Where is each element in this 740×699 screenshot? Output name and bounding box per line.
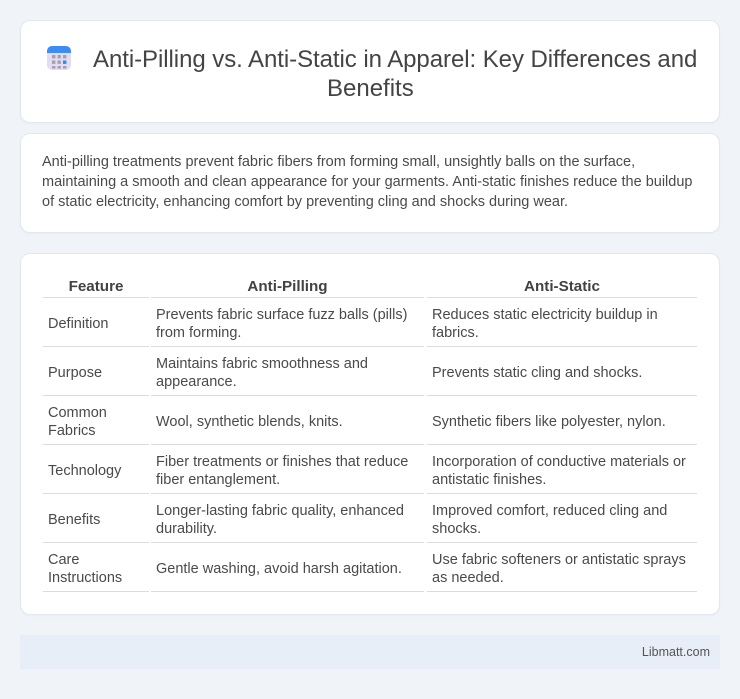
icon: calendar bbox=[47, 46, 71, 70]
row: benefits bbox=[48, 503, 667, 537]
intro text: Anti-pilling treatments prevent fabric fibers from forming small, unsightly balls on the surface, bbox=[42, 154, 635, 170]
row: technology: fiber entanglement. bbox=[156, 472, 280, 488]
row: purpose: Purpose bbox=[48, 365, 102, 381]
row: definition: fabrics. bbox=[432, 325, 479, 341]
row: benefits: Improved comfort, reduced cling and bbox=[432, 503, 667, 519]
row: benefits: durability. bbox=[156, 521, 217, 537]
row: common fabrics: Wool, synthetic blends, knits. bbox=[156, 414, 343, 430]
row: technology: antistatic finishes. bbox=[432, 472, 546, 488]
title panel bbox=[20, 20, 720, 123]
intro text: maintaining a smooth and clean appearance for your garments. Anti-static finishes reduce the buildup bbox=[42, 174, 692, 190]
footer bar bbox=[20, 635, 720, 669]
row: definition: from forming. bbox=[156, 325, 241, 341]
row: technology bbox=[48, 454, 686, 488]
row: common fabrics: Fabrics bbox=[48, 423, 96, 439]
row: definition bbox=[48, 307, 658, 341]
row: care instructions: Gentle washing, avoid harsh agitation. bbox=[156, 561, 402, 577]
row: definition: Definition bbox=[48, 316, 108, 332]
row: purpose: Prevents static cling and shocks. bbox=[432, 365, 642, 381]
title: Benefits bbox=[327, 75, 414, 102]
row: care instructions: Instructions bbox=[48, 570, 122, 586]
row: technology: Fiber treatments or finishes that reduce bbox=[156, 454, 408, 470]
row: common fabrics bbox=[48, 405, 666, 439]
row: common fabrics: Common bbox=[48, 405, 107, 421]
row: purpose: appearance. bbox=[156, 374, 237, 390]
row: purpose bbox=[48, 356, 642, 390]
intro text bbox=[42, 154, 692, 210]
table header: Anti-Static bbox=[524, 278, 600, 295]
intro text: of static electricity, enhancing comfort by preventing cling and shocks during wear. bbox=[42, 194, 568, 210]
row: benefits: shocks. bbox=[432, 521, 481, 537]
row: benefits: Longer-lasting fabric quality, enhanced bbox=[156, 503, 404, 519]
row: care instructions: Care bbox=[48, 552, 79, 568]
row: care instructions: Use fabric softeners or antistatic sprays bbox=[432, 552, 686, 568]
row: care instructions bbox=[48, 552, 686, 586]
table header: Feature bbox=[69, 278, 123, 295]
row: care instructions: as needed. bbox=[432, 570, 504, 586]
row: definition: Prevents fabric surface fuzz balls (pills) bbox=[156, 307, 407, 323]
row: purpose: Maintains fabric smoothness and bbox=[156, 356, 368, 372]
row: technology: Technology bbox=[48, 463, 121, 479]
row: technology: Incorporation of conductive materials or bbox=[432, 454, 686, 470]
footer text: Libmatt.com bbox=[642, 645, 710, 659]
table header bbox=[69, 278, 600, 295]
title bbox=[93, 46, 697, 102]
intro panel bbox=[20, 133, 720, 233]
table header: Anti-Pilling bbox=[247, 278, 328, 295]
row: common fabrics: Synthetic fibers like polyester, nylon. bbox=[432, 414, 666, 430]
comparison table panel bbox=[20, 253, 720, 615]
row: definition: Reduces static electricity buildup in bbox=[432, 307, 658, 323]
title: Anti-Pilling vs. Anti-Static in Apparel: Key Differences and bbox=[93, 46, 697, 73]
row: benefits: Benefits bbox=[48, 512, 100, 528]
